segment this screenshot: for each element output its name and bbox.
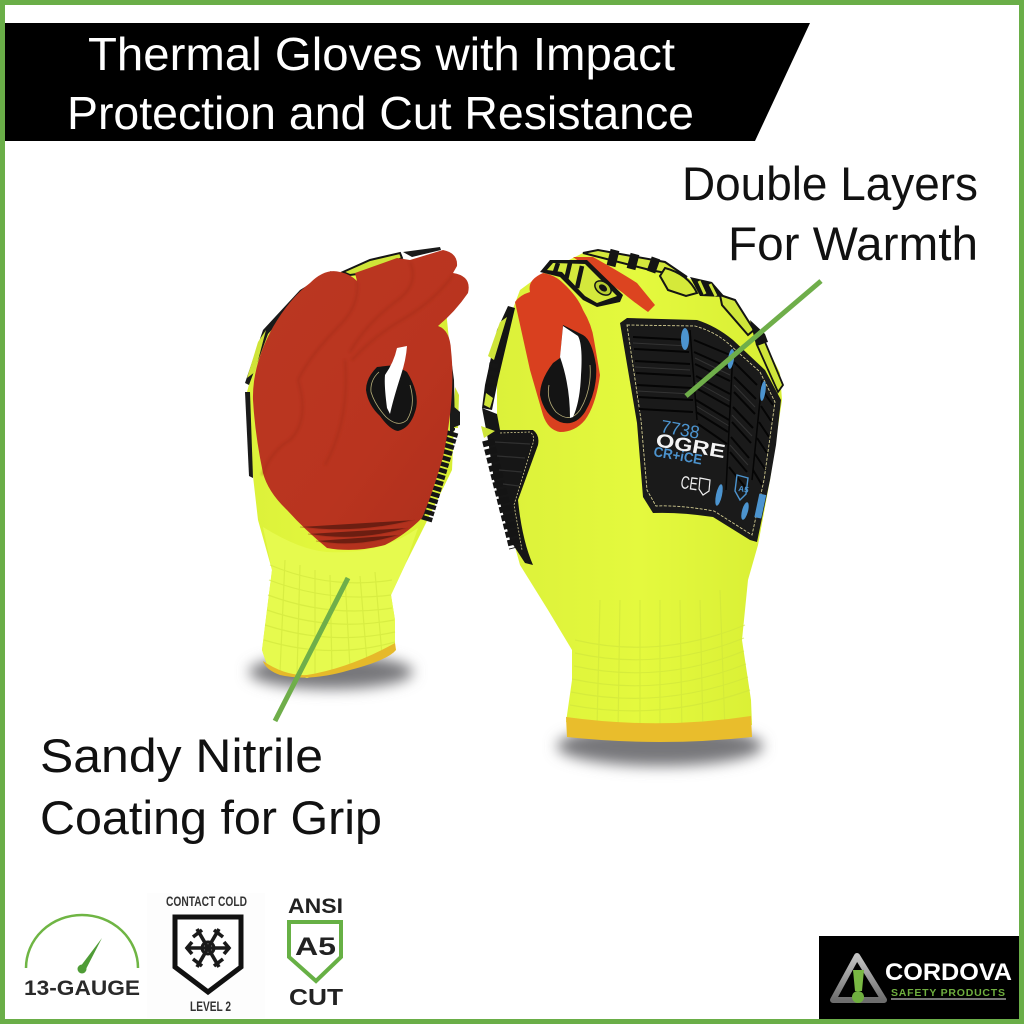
main impact pad	[620, 318, 781, 542]
snowflake	[186, 929, 230, 967]
callout: sandy nitrile coating for grip	[40, 729, 382, 844]
icon: contact cold level 2: CONTACT COLD	[166, 893, 247, 909]
leader line: left	[275, 578, 348, 721]
callout: double layers for warmth	[682, 157, 978, 270]
icon: 13-gauge	[24, 915, 140, 1000]
right edge pad	[448, 335, 455, 435]
pad printing: model text: OGRE	[654, 430, 727, 463]
icon: ANSI A5 cut: ANSI	[288, 895, 343, 918]
knuckle pad 1	[540, 260, 623, 307]
logo: Cordova Safety Products: SAFETY PRODUCTS	[891, 987, 1005, 999]
knuckle pads top row	[583, 250, 783, 392]
icon: 13-gauge: 13-GAUGE	[24, 977, 140, 1000]
leader line: right	[686, 281, 821, 396]
knit body	[497, 253, 782, 738]
red coating on thumb and finger	[515, 273, 600, 432]
callout: sandy nitrile coating for grip: Coating for Grip	[40, 791, 382, 844]
glove: palm view (left)	[245, 247, 469, 689]
pad ridges	[633, 337, 773, 487]
glove: back view (right)	[481, 250, 783, 766]
banner: title	[5, 23, 810, 141]
callout: double layers for warmth: For Warmth	[728, 217, 978, 270]
pad printing: model text: 7738	[659, 416, 701, 443]
icon: ANSI A5 cut: CUT	[289, 984, 343, 1010]
banner: title: Thermal Gloves with Impact	[88, 28, 675, 80]
red nitrile coating	[253, 250, 469, 550]
icon: contact cold level 2: LEVEL 2	[190, 999, 231, 1014]
black thumb crotch patch and opening	[366, 365, 417, 431]
knit body	[247, 262, 455, 678]
icon: ANSI A5 cut: A5	[295, 933, 336, 961]
icon: ANSI A5 cut	[288, 895, 343, 1010]
cuff hem	[263, 643, 396, 678]
pad printing: model text: CR+iCE	[652, 443, 704, 467]
back-of-hand pads, edge	[245, 271, 332, 385]
cuff ribs	[264, 560, 395, 675]
cuff ribbing	[570, 590, 750, 737]
callout: sandy nitrile coating for grip: Sandy Nitrile	[40, 729, 323, 782]
thumb opening	[540, 325, 596, 423]
pad printing: model text: CE	[679, 472, 699, 494]
callout: double layers for warmth: Double Layers	[682, 157, 978, 210]
pad printing: model text	[652, 416, 766, 519]
icon: contact cold level 2	[147, 893, 265, 1018]
top pad	[343, 253, 402, 275]
logo: Cordova Safety Products: CORDOVA	[885, 959, 1012, 986]
blue accents	[681, 328, 767, 520]
banner: title: Protection and Cut Resistance	[67, 87, 694, 139]
logo: Cordova Safety Products	[819, 936, 1019, 1019]
cuff hem	[566, 716, 752, 742]
pad printing: model text: A5	[738, 484, 750, 495]
finger creases	[262, 262, 453, 475]
side pads on thumb	[481, 306, 538, 565]
